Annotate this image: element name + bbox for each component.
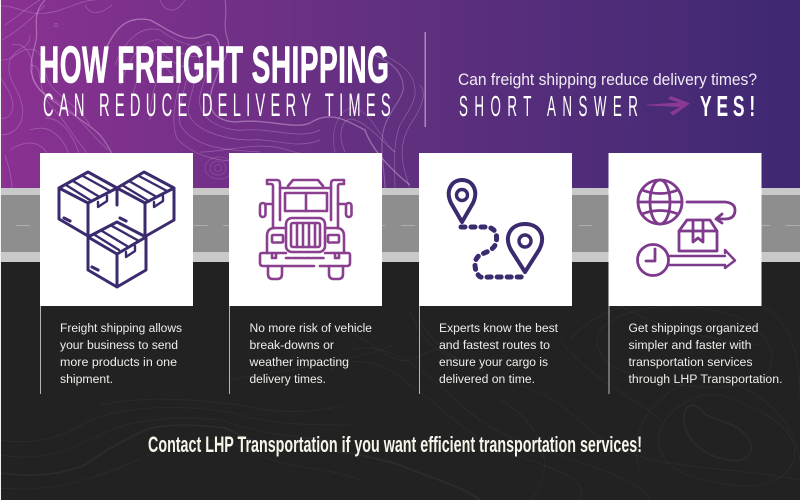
icon: route pins (449, 180, 542, 277)
text: card 3: delivered on time. (439, 372, 535, 386)
text: card 4: transportation services (628, 355, 752, 369)
text: card 2: break-downs or (250, 338, 334, 352)
text: card 2 (249, 321, 372, 386)
title line 1: HOW FREIGHT SHIPPING (39, 35, 389, 94)
yes: YES! (700, 91, 755, 123)
icon: globe, parcel and clock (638, 180, 735, 276)
title (39, 35, 391, 124)
text: card 1: more products in one (60, 355, 177, 369)
text: card 1: Freight shipping allows (60, 321, 182, 335)
panel: dark lower background (0, 260, 800, 500)
text: card 4: simpler and faster with (628, 338, 752, 352)
panel: card 2 (229, 153, 382, 394)
text: card 1: your business to send (60, 338, 178, 352)
header contour pattern (0, 0, 423, 190)
panel: card 3 (419, 153, 572, 394)
text: card 3 (439, 321, 559, 386)
short answer block (458, 71, 757, 123)
panel: purple header background (0, 0, 800, 190)
road (0, 188, 800, 262)
text: card 1 (60, 321, 182, 386)
title line 2: CAN REDUCE DELIVERY TIMES (43, 88, 391, 124)
text: card 1: shipment. (60, 372, 113, 386)
text: card 2: No more risk of vehicle (250, 321, 372, 335)
arrow (647, 96, 690, 116)
text: card 3: and fastest routes to (439, 338, 550, 352)
text: card 2: delivery times. (250, 372, 326, 386)
text: card 2: weather impacting (249, 355, 349, 369)
divider (424, 32, 426, 127)
panel: card 4 (608, 153, 782, 394)
icon: truck (260, 180, 352, 279)
text: card 4: Get shippings organized (628, 321, 759, 335)
text: card 3: ensure your cargo is (439, 355, 548, 369)
text: card 3: Experts know the best (439, 321, 559, 335)
icon: boxes (59, 172, 174, 287)
dark background contour pattern (0, 295, 800, 500)
text: card 4 (628, 321, 782, 386)
question: Can freight shipping reduce delivery times? (458, 71, 757, 89)
left edge highlight (0, 0, 1, 500)
panel: card 1 (40, 153, 193, 394)
short answer: SHORT ANSWER (459, 90, 638, 122)
text: card 4: through LHP Transportation. (628, 372, 782, 386)
